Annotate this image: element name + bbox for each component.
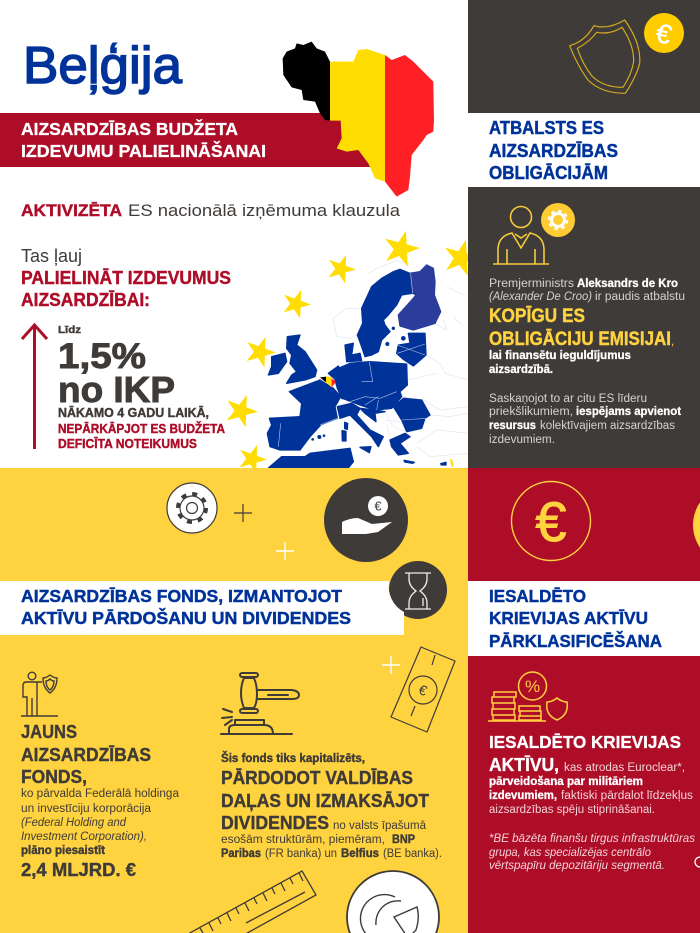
- text: new defence fund: ko pārvalda Federālā holdinga: [21, 788, 180, 800]
- text: prime minister support: ir paudis atbalstu: [595, 291, 685, 303]
- text: frozen assets body: IESALDĒTO KRIEVIJAS: [489, 732, 681, 752]
- heading: fund title: AKTĪVU PĀRDOŠANU UN DIVIDENDES: [21, 607, 351, 628]
- text: new defence fund: Investment Corporation),: [21, 831, 147, 843]
- icon: hand with coin: [324, 478, 408, 562]
- text: new defence fund: FONDS,: [21, 766, 87, 787]
- text: prime minister support: kolektīvajiem aizsardzības: [540, 420, 675, 432]
- icon: pie chart circle: [347, 871, 439, 933]
- text: prime minister support: OBLIGĀCIJU EMISIJAI: [489, 329, 671, 350]
- text: frozen assets body: izdevumiem,: [489, 790, 557, 802]
- banner: budget heading: [0, 113, 372, 167]
- text: prime minister support: Premjerministrs: [489, 278, 574, 290]
- arrow: up: [22, 325, 47, 449]
- panel: EU defence bonds: [468, 0, 700, 468]
- heading: bonds support: [468, 113, 700, 187]
- text: sell government shares: DIVIDENDES: [221, 812, 329, 833]
- text: frozen assets body: faktiski pārdalot līdzekļus: [561, 790, 693, 802]
- heading: reclassification: PĀRKLASIFICĒŠANA: [489, 630, 662, 651]
- text: footnote: [489, 833, 695, 872]
- text: footnote: grupa, kas specializējas centrālo: [489, 847, 652, 859]
- text: frozen assets body: pārveidošana par militāriem: [489, 776, 643, 788]
- icon: yellow coin at edge: [693, 485, 700, 565]
- text: new defence fund: un investīciju korporācija: [21, 803, 152, 815]
- text: prime minister support: lai finansētu ieguldījumus: [489, 350, 631, 362]
- text: clause activated: ES nacionālā izņēmuma klauzula: [128, 201, 401, 220]
- text: new defence fund: plāno piesaistīt: [21, 845, 105, 857]
- icon: gavel: [221, 673, 299, 734]
- text: new defence fund: AIZSARDZĪBAS: [21, 744, 151, 765]
- heading: reclassification: [468, 581, 700, 656]
- text: sell government shares: (FR banka) un: [265, 848, 337, 860]
- heading: fund title: [0, 581, 404, 635]
- icon: banknote: €: [417, 681, 430, 699]
- icon: gear circle: [167, 483, 217, 533]
- heading: fund title: AIZSARDZĪBAS FONDS, IZMANTOJOT: [21, 586, 342, 606]
- icon: euro coin: [644, 13, 684, 53]
- text: allows raising spending: AIZSARDZĪBAI:: [21, 290, 150, 310]
- text: prime minister support: resursus: [489, 420, 536, 432]
- panel: Belgium budget clause: [0, 0, 483, 475]
- icon: euro circle: [512, 482, 590, 560]
- icon: coins, percent and shield: %: [525, 677, 540, 696]
- text: prime minister support: izdevumiem.: [489, 434, 555, 446]
- panel: frozen Russian assets: [468, 468, 700, 933]
- heading: reclassification: KRIEVIJAS AKTĪVU: [489, 608, 648, 628]
- text: allows raising spending: Tas ļauj: [21, 246, 82, 266]
- icon: cropped ring at edge: [695, 857, 700, 867]
- text: allows raising spending: PALIELINĀT IZDEVUMUS: [21, 268, 231, 288]
- icon: person with gear: [493, 203, 575, 264]
- text: sell government shares: Belfius: [341, 848, 379, 860]
- text: sell government shares: esošām struktūrām, piemēram,: [221, 834, 385, 846]
- icon: white plus: [276, 542, 294, 560]
- icon: coins, percent and shield: [488, 672, 567, 721]
- text: prime minister support: Aleksandrs de Kro: [577, 278, 678, 290]
- text: clause activated: [21, 201, 401, 220]
- panel: defence fund: [0, 468, 468, 933]
- text: prime minister support: ,: [671, 336, 674, 348]
- text: sell government shares: [221, 752, 442, 860]
- text: frozen assets body: kas atrodas Euroclear*,: [564, 762, 685, 774]
- key figure: 1.5% of GDP: 1,5%: [58, 337, 146, 376]
- text: sell government shares: (BE banka).: [383, 848, 442, 860]
- text: frozen assets body: [489, 732, 693, 816]
- text: prime minister support: aizsardzībā.: [489, 364, 553, 376]
- text: new defence fund: [21, 721, 180, 880]
- text: sell government shares: DAĻAS UN IZMAKSĀJOT: [221, 790, 430, 811]
- text: sell government shares: Šis fonds tiks kapitalizēts,: [221, 752, 365, 765]
- icon: dark plus: [234, 504, 252, 522]
- title: Belgium: Beļģija: [23, 37, 182, 95]
- icon: euro circle: €: [535, 490, 567, 553]
- heading: bonds support: AIZSARDZĪBAS: [489, 141, 618, 161]
- icon: white plus near banknote: [382, 656, 400, 674]
- banner: budget heading: AIZSARDZĪBAS BUDŽETA: [21, 118, 238, 139]
- text: frozen assets body: AKTĪVU,: [489, 754, 559, 775]
- key figure: 1.5% of GDP: NEPĀRKĀPJOT ES BUDŽETA: [58, 421, 225, 436]
- key figure: 1.5% of GDP: Līdz: [58, 324, 81, 336]
- text: prime minister support: priekšlikumiem,: [489, 406, 573, 418]
- text: prime minister support: iespējams apvienot: [576, 406, 681, 418]
- icon: ruler: [188, 871, 316, 933]
- text: new defence fund: 2,4 MLJRD. €: [21, 859, 136, 880]
- key figure: 1.5% of GDP: DEFICĪTA NOTEIKUMUS: [58, 437, 197, 451]
- map: Belgian flag silhouette: [283, 42, 434, 197]
- text: sell government shares: BNP: [392, 834, 415, 846]
- icon: hand with coin: €: [374, 498, 382, 514]
- text: prime minister support: (Alexander De Croo): [489, 291, 592, 303]
- text: prime minister support: [489, 278, 685, 446]
- text: prime minister support: KOPĪGU ES: [489, 306, 585, 327]
- map: European Union with stars: [221, 226, 483, 475]
- text: frozen assets body: aizsardzības spēju stiprināšanai.: [489, 804, 655, 816]
- text: sell government shares: PĀRDODOT VALDĪBAS: [221, 767, 413, 788]
- text: allows raising spending: [21, 246, 231, 310]
- text: sell government shares: no valsts īpašumā: [333, 820, 427, 832]
- key figure: 1.5% of GDP: [58, 324, 225, 451]
- text: prime minister support: Saskaņojot to ar citu ES līderu: [489, 393, 647, 405]
- text: new defence fund: JAUNS: [21, 721, 77, 742]
- key figure: 1.5% of GDP: no IKP: [58, 369, 175, 410]
- icon: euro coin: €: [653, 18, 675, 50]
- heading: bonds support: ATBALSTS ES: [489, 118, 604, 138]
- icon: hourglass: [389, 561, 447, 619]
- text: new defence fund: (Federal Holding and: [21, 817, 127, 829]
- icon: person with shield: [21, 672, 58, 716]
- text: footnote: vērtspapīru depozitāriju segmentā.: [489, 860, 665, 872]
- text: clause activated: AKTIVIZĒTA: [21, 201, 122, 220]
- heading: reclassification: IESALDĒTO: [489, 586, 586, 606]
- text: footnote: *BE bāzēta finanšu tirgus infrastruktūras: [489, 833, 695, 845]
- icon: shield: [570, 20, 640, 93]
- key figure: 1.5% of GDP: NĀKAMO 4 GADU LAIKĀ,: [58, 406, 209, 420]
- text: sell government shares: Paribas: [221, 848, 261, 860]
- icon: banknote: [391, 647, 455, 732]
- heading: bonds support: OBLIGĀCIJĀM: [489, 163, 608, 183]
- banner: budget heading: IZDEVUMU PALIELINĀŠANAI: [21, 140, 266, 161]
